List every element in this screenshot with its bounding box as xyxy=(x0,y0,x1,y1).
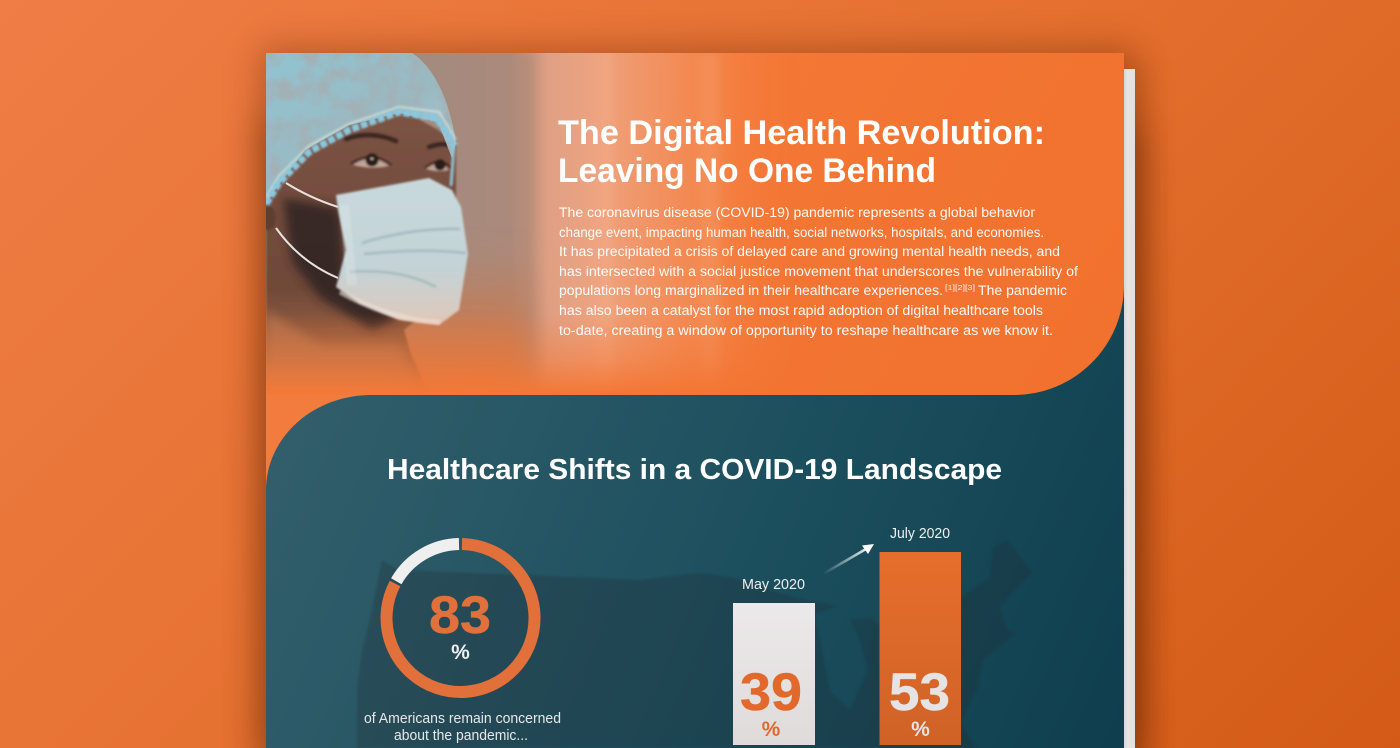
ear xyxy=(266,206,276,230)
intro text block: populations long marginalized in their healthcare experiences. xyxy=(559,283,943,298)
page xyxy=(240,53,1124,748)
bar: July 2020: 53 xyxy=(889,663,950,722)
caption: concern about the pandemic: of Americans remain concerned xyxy=(364,711,561,727)
intro text block: It has precipitated a crisis of delayed care and growing mental health needs, and xyxy=(559,244,1060,259)
neck and face xyxy=(266,108,456,395)
intro text block xyxy=(559,205,1078,338)
bar: May 2020: 39 xyxy=(740,663,802,722)
panel: teal lower section xyxy=(266,285,1124,748)
donut chart: 83 percent: 83 xyxy=(429,586,491,645)
section heading: Healthcare Shifts in a COVID-19 Landscape xyxy=(387,454,1002,486)
intro text block: has also been a catalyst for the most rapid adoption of digital healthcare tools xyxy=(559,303,1043,318)
caption: concern about the pandemic: about the pandemic... xyxy=(394,728,528,744)
title: The Digital Health Revolution: xyxy=(558,114,1045,152)
intro text block: [1][2][3] xyxy=(945,283,975,292)
surgical mask xyxy=(336,178,468,325)
bar: July 2020: % xyxy=(911,718,930,741)
intro text block: change event, impacting human health, social networks, hospitals, and economies. xyxy=(559,225,1044,240)
back sheet of paper xyxy=(1120,69,1135,748)
title xyxy=(558,114,1045,190)
donut chart: 83 percent: % xyxy=(451,641,470,664)
title: Leaving No One Behind xyxy=(558,152,936,190)
bar: July 2020: July 2020 xyxy=(890,526,950,542)
intro text block: has intersected with a social justice movement that underscores the vulnerability of xyxy=(559,264,1078,279)
bar: July 2020 xyxy=(880,526,961,745)
caption: concern about the pandemic xyxy=(364,711,561,744)
photo: masked healthcare worker xyxy=(266,53,748,388)
bar: May 2020: % xyxy=(762,718,781,741)
eyes xyxy=(351,154,451,171)
arrow: May to July xyxy=(823,544,874,574)
donut chart: 83 percent xyxy=(387,544,535,692)
beard xyxy=(283,198,398,330)
panel: orange header xyxy=(240,53,1124,420)
bar: May 2020 xyxy=(733,577,815,745)
bar: May 2020: May 2020 xyxy=(742,577,805,593)
intro text block: The pandemic xyxy=(978,283,1067,298)
intro text block: to-date, creating a window of opportunity to reshape healthcare as we know it. xyxy=(559,323,1053,338)
ear loops xyxy=(276,183,338,278)
intro text block: The coronavirus disease (COVID-19) pandemic represents a global behavior xyxy=(559,205,1036,220)
eyebrows xyxy=(346,135,453,147)
map of the United States xyxy=(357,540,1033,748)
surgical cap xyxy=(266,53,461,208)
